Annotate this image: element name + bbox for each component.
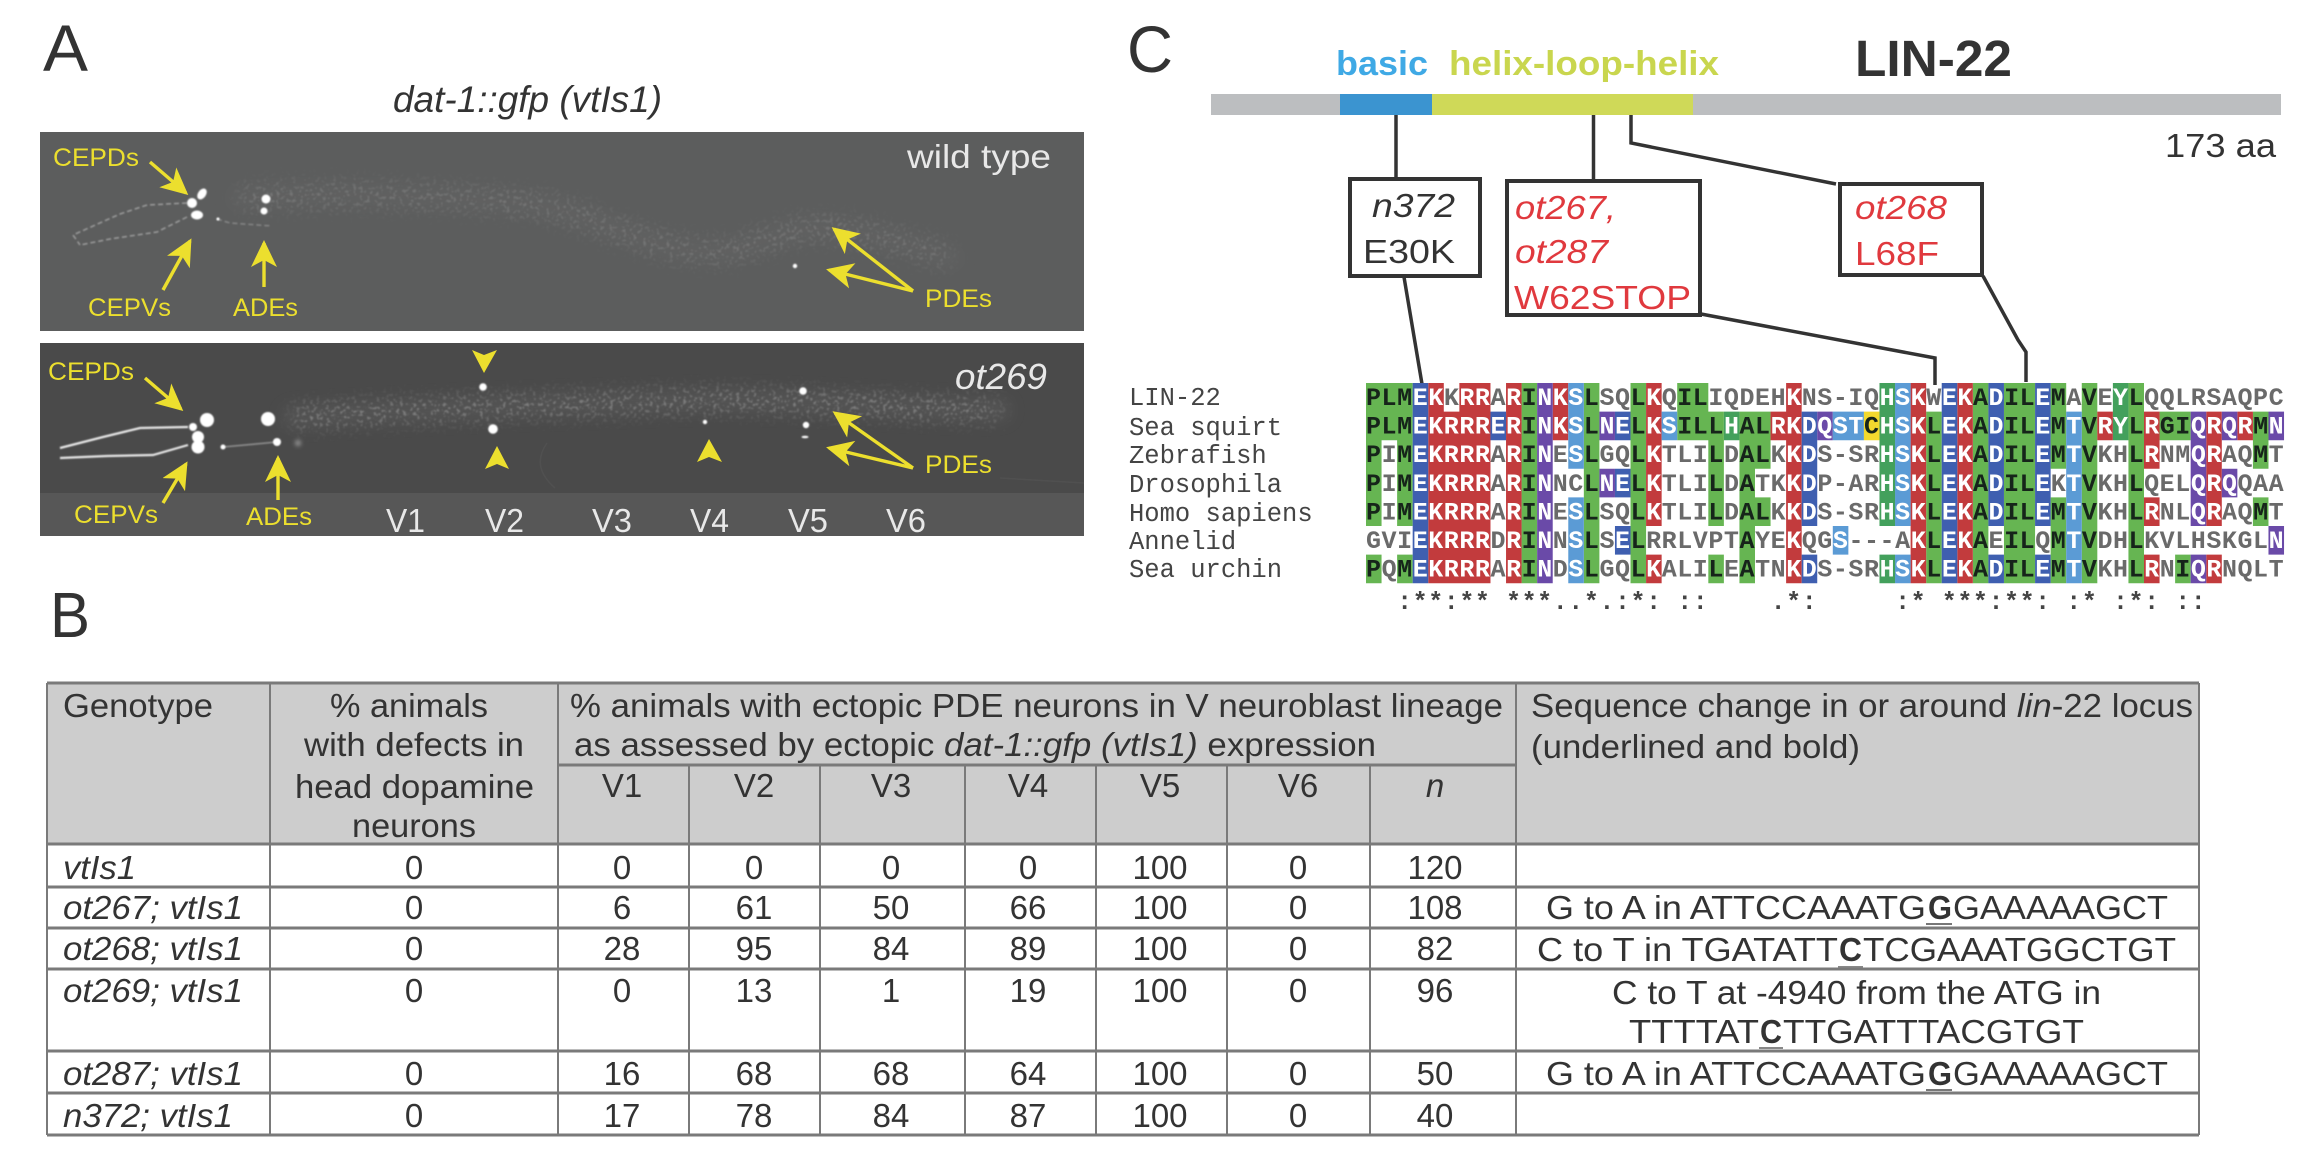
V1 to V6 position labels: V4 <box>690 502 729 539</box>
residue letters: PLMEKKRRARINKSLSQLKQILIQDEHKNS-IQHSKWEKADILEMAVEYLQQLRSAQPC <box>1366 384 2284 413</box>
table header text: V5 <box>1140 767 1180 804</box>
table header text: (underlined and bold) <box>1531 728 1860 765</box>
label ADEs: ADEs <box>233 294 298 322</box>
row vtIs1: 0 <box>613 849 631 886</box>
row ot268: 84 <box>873 930 909 967</box>
row ot268: 100 <box>1132 930 1188 967</box>
row n372: n372; vtIs1 <box>63 1097 233 1134</box>
species names: LIN-22 <box>1129 384 1221 413</box>
label PDEs: PDEs <box>925 451 992 479</box>
row ot269: TTTTAT <box>1629 1013 1759 1050</box>
row ot268: 89 <box>1010 930 1046 967</box>
domain label helix-loop-helix: helix-loop-helix <box>1449 45 1719 83</box>
row vtIs1: vtIs1 <box>63 849 136 886</box>
row vtIs1: 0 <box>1289 849 1307 886</box>
row ot267: 66 <box>1010 889 1046 926</box>
table header background <box>47 683 2199 844</box>
V1 to V6 position labels: V5 <box>788 502 828 539</box>
row ot267: 0 <box>1289 889 1307 926</box>
worm body haze <box>240 195 950 258</box>
sequence alignment <box>1366 384 2284 617</box>
yellow arrows <box>145 378 913 503</box>
protein domain bar <box>1211 94 2281 115</box>
row ot287: 100 <box>1132 1055 1188 1092</box>
species names: Drosophila <box>1129 471 1282 500</box>
table grid <box>47 683 2199 1135</box>
table header text: V4 <box>1008 767 1048 804</box>
row ot267: 100 <box>1132 889 1188 926</box>
row ot269: 0 <box>1289 972 1307 1009</box>
row ot269: 1 <box>882 972 900 1009</box>
worm body speckle <box>240 195 950 258</box>
row ot269: C to T at -4940 from the ATG in <box>1612 974 2101 1011</box>
row ot268: 0 <box>1289 930 1307 967</box>
yellow arrows <box>150 162 913 291</box>
species names: Sea urchin <box>1129 556 1282 585</box>
table header text: V6 <box>1278 767 1318 804</box>
panel A: GFP micrographs <box>40 11 1084 539</box>
row vtIs1: 0 <box>405 849 423 886</box>
worm body speckle <box>293 400 1000 417</box>
table header text: Sequence change in or around lin-22 locus <box>1531 687 2193 724</box>
mutation box ot267, ot287: W62STOP <box>1514 279 1691 316</box>
species names: Annelid <box>1129 528 1236 557</box>
row ot269: TTGATTTACGTGT <box>1783 1013 2084 1050</box>
row vtIs1 <box>63 849 1463 886</box>
panel letter A: A <box>43 11 88 85</box>
label CEPDs: CEPDs <box>48 358 134 386</box>
table header text <box>63 687 2193 844</box>
mutation box ot268 <box>1840 184 1982 275</box>
table header text: as assessed by ectopic dat-1::gfp (vtIs1) expression <box>574 726 1376 763</box>
protein length: 173 aa <box>2165 127 2277 164</box>
mutation box n372 <box>1350 179 1480 276</box>
row vtIs1: 100 <box>1132 849 1188 886</box>
row ot269: 13 <box>736 972 772 1009</box>
species names <box>1129 384 1313 585</box>
row ot269: 96 <box>1417 972 1453 1009</box>
V1 to V6 position labels <box>386 502 926 539</box>
table header text: head dopamine <box>295 768 534 805</box>
table header text: % animals with ectopic PDE neurons in V neuroblast lineage <box>570 687 1503 724</box>
neuron processes <box>60 427 277 458</box>
row ot268: 82 <box>1417 930 1453 967</box>
table header text: n <box>1426 767 1444 804</box>
row n372: 100 <box>1132 1097 1188 1134</box>
row n372: 0 <box>405 1097 423 1134</box>
table header text: Genotype <box>63 687 213 724</box>
table header text: % animals <box>330 687 488 724</box>
mutation box ot268: L68F <box>1855 235 1939 272</box>
residue colour blocks <box>1366 397 2284 569</box>
row ot267: 61 <box>736 889 772 926</box>
row ot287: ot287; vtIs1 <box>63 1055 243 1092</box>
residue letters <box>1366 384 2284 585</box>
residue letters: PQMEKRRRARINDSLGQLKALILEATNKDS-SRHSKLEKADILEMTVKHLRNIQRNQLT <box>1366 556 2284 585</box>
row ot269: 0 <box>613 972 631 1009</box>
row ot268: C to T in TGATATT <box>1537 931 1838 968</box>
panel letter B: B <box>50 579 90 651</box>
residue letters: PLMEKRRRERINKSLNELKSILLHALRKDQSTCHSKLEKADILEMTVRYLRGIQRQRMN <box>1366 413 2284 442</box>
row ot267: G <box>1928 889 1952 926</box>
panel C: LIN-22 protein and alignment <box>1127 12 2284 617</box>
row ot287: 16 <box>604 1055 640 1092</box>
row ot287: 0 <box>1289 1055 1307 1092</box>
heading: reporter name: dat-1::gfp (vtIs1) <box>393 79 662 120</box>
table header text: V3 <box>871 767 911 804</box>
row ot267 <box>63 889 2168 926</box>
row ot287: GAAAAAGCT <box>1953 1055 2168 1092</box>
mutation box ot268: ot268 <box>1855 189 1948 226</box>
yellow arrowheads marking ectopic neurons <box>472 350 722 469</box>
table header text: V2 <box>734 767 774 804</box>
label ADEs: ADEs <box>246 503 312 531</box>
row ot267: GAAAAAGCT <box>1953 889 2168 926</box>
row vtIs1: 0 <box>1019 849 1037 886</box>
row ot287: 68 <box>736 1055 772 1092</box>
row ot267: 6 <box>613 889 631 926</box>
bright neuron bodies <box>189 383 809 454</box>
row ot267: G to A in ATTCCAAATG <box>1546 889 1926 926</box>
leader lines <box>1396 115 2026 385</box>
row ot287: 50 <box>1417 1055 1453 1092</box>
row n372: 87 <box>1010 1097 1046 1134</box>
label wild type: wild type <box>906 138 1051 175</box>
row ot268: 28 <box>604 930 640 967</box>
panel letter C: C <box>1127 12 1173 86</box>
residue letters: GVIEKRRRDRINNSLSELRRLVPTAYEKQGS---AKLEKAEILQMTVDHLKVLHSKGLN <box>1366 527 2284 556</box>
conservation line: :**:** ***..*.:*: :: .*: :* ***:**: :* :*: :: <box>1366 588 2206 617</box>
mutation box ot267, ot287 <box>1507 181 1700 316</box>
row ot287: G <box>1928 1055 1952 1092</box>
row vtIs1: 0 <box>882 849 900 886</box>
row ot287: 0 <box>405 1055 423 1092</box>
row n372: 78 <box>736 1097 772 1134</box>
mutation box ot267, ot287: ot267, <box>1515 189 1616 226</box>
row ot267: ot267; vtIs1 <box>63 889 243 926</box>
label ot269: ot269 <box>955 356 1047 397</box>
species names: Zebrafish <box>1129 442 1267 471</box>
row ot269: 0 <box>405 972 423 1009</box>
row ot269: 19 <box>1010 972 1046 1009</box>
row n372 <box>63 1097 1453 1134</box>
row ot269: 100 <box>1132 972 1188 1009</box>
row ot268: ot268; vtIs1 <box>63 930 243 967</box>
row n372: 0 <box>1289 1097 1307 1134</box>
V1 to V6 position labels: V1 <box>386 502 425 539</box>
row ot287 <box>63 1055 2168 1092</box>
label CEPVs: CEPVs <box>88 294 171 322</box>
species names: Homo sapiens <box>1129 500 1313 529</box>
row ot268: TCGAAATGGCTGT <box>1863 931 2176 968</box>
protein name: LIN-22 <box>1855 30 2012 87</box>
table header text: V1 <box>602 767 642 804</box>
species names: Sea squirt <box>1129 414 1282 443</box>
residue letters: PIMEKRRRARINNCLNELKTLILDATKKDP-ARHSKLEKADILEKTVKHLQELQRQQAA <box>1366 470 2284 499</box>
row vtIs1: 120 <box>1407 849 1463 886</box>
row ot287: 68 <box>873 1055 909 1092</box>
bright neuron bodies <box>187 187 797 268</box>
neuron processes <box>73 203 272 245</box>
residue letters: PIMEKRRRARINESLGQLKTLILDALKKDS-SRHSKLEKADILEMTVKHLRNMQRAQMT <box>1366 441 2284 470</box>
row n372: 84 <box>873 1097 909 1134</box>
row ot269 <box>63 972 2101 1050</box>
micrograph: ot269 mutant <box>40 343 1084 539</box>
row ot269: ot269; vtIs1 <box>63 972 243 1009</box>
V1 to V6 position labels: V3 <box>592 502 632 539</box>
micrograph: wild type <box>40 132 1084 331</box>
mutation box n372: n372 <box>1372 187 1455 224</box>
mutation box n372: E30K <box>1363 233 1455 270</box>
row ot269: C <box>1760 1013 1782 1050</box>
mutation box ot267, ot287: ot287 <box>1515 233 1610 270</box>
row ot267: 0 <box>405 889 423 926</box>
row ot287: G to A in ATTCCAAATG <box>1546 1055 1926 1092</box>
row n372: 40 <box>1417 1097 1453 1134</box>
domain label basic: basic <box>1336 45 1428 83</box>
V1 to V6 position labels: V6 <box>886 502 926 539</box>
row ot268 <box>63 930 2176 968</box>
table header text: neurons <box>352 807 476 844</box>
label CEPVs: CEPVs <box>74 501 158 529</box>
row ot287: 64 <box>1010 1055 1046 1092</box>
row ot268: 0 <box>405 930 423 967</box>
row ot267: 108 <box>1407 889 1463 926</box>
row vtIs1: 0 <box>745 849 763 886</box>
table header text: with defects in <box>303 726 524 763</box>
V1 to V6 position labels: V2 <box>485 502 524 539</box>
row n372: 17 <box>604 1097 640 1134</box>
residue letters: PIMEKRRRARINESLSQLKTLILDALKKDS-SRHSKLEKADILEMTVKHLRNLQRAQMT <box>1366 498 2284 527</box>
row ot268: C <box>1839 931 1862 968</box>
panel B: results table <box>47 579 2199 1135</box>
row ot268: 95 <box>736 930 772 967</box>
worm body haze <box>293 400 1000 417</box>
row ot267: 50 <box>873 889 909 926</box>
label PDEs: PDEs <box>925 285 992 313</box>
label CEPDs: CEPDs <box>53 144 139 172</box>
